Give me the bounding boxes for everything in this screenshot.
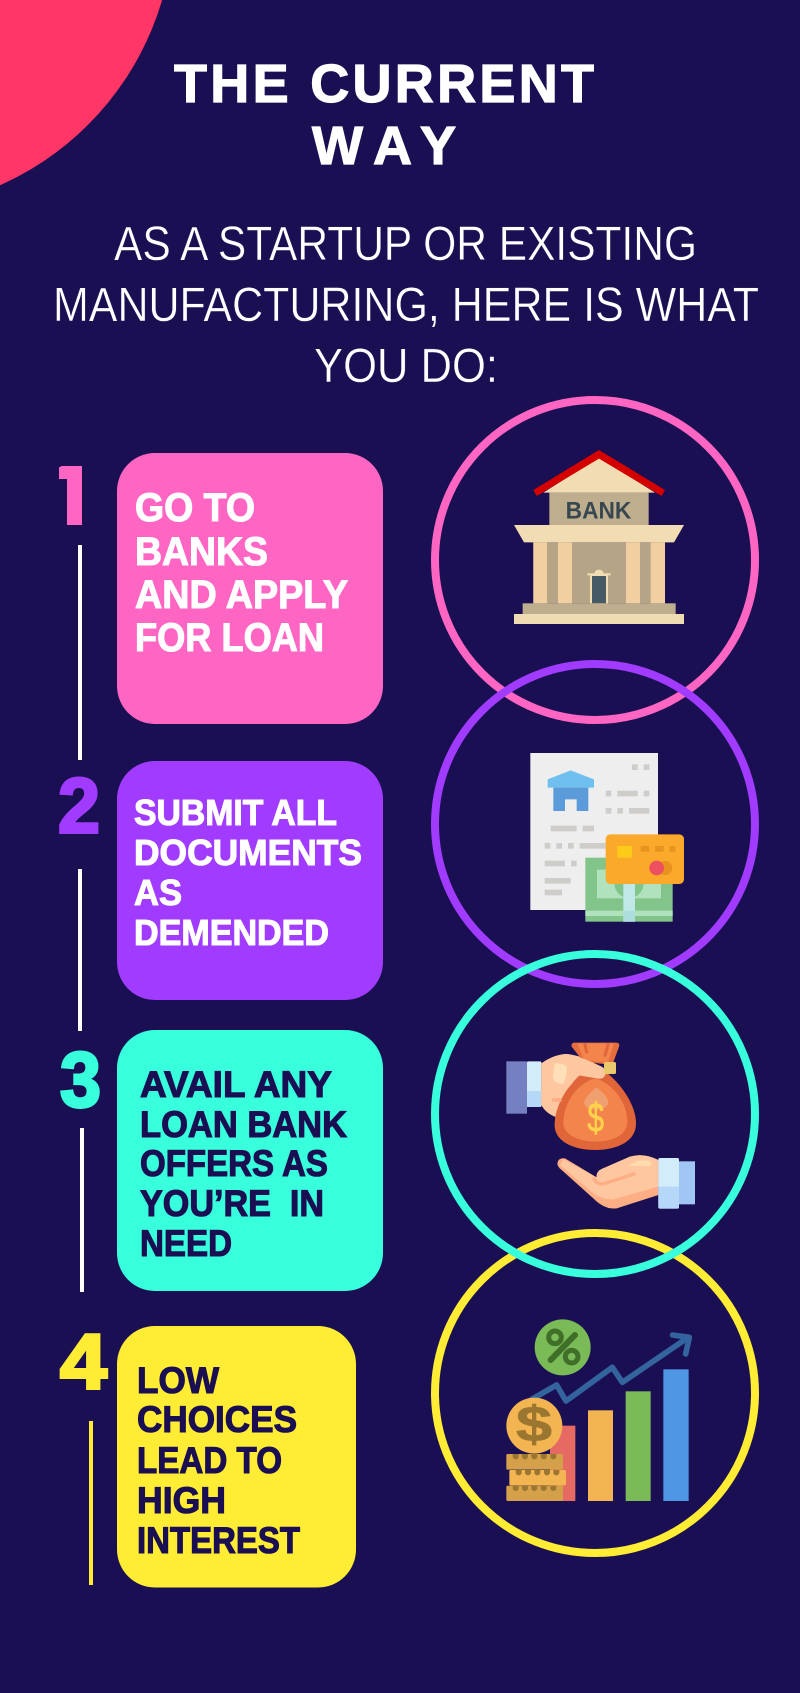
icon: hands exchanging money bag [506, 1043, 695, 1209]
step 3: card: AVAIL ANY [140, 1064, 332, 1105]
step 4: card [117, 1326, 356, 1588]
subtitle [53, 218, 759, 393]
icon: rising bar chart with coins: $ [516, 1397, 552, 1453]
step 2: card: AS [134, 872, 182, 913]
step 1: card [117, 453, 383, 724]
step 4: card: LEAD TO [137, 1440, 282, 1481]
icon: hands exchanging money bag: $ [587, 1094, 604, 1140]
step 2: card: DOCUMENTS [134, 832, 362, 873]
circle ring: step 3 [435, 954, 755, 1274]
corner decorative circle [0, 0, 174, 210]
step 3: number: 3 [60, 1036, 101, 1124]
icon: bank building: BANK [566, 498, 632, 525]
step 2: card [117, 761, 383, 1000]
subtitle: AS A STARTUP OR EXISTING [114, 218, 697, 271]
subtitle: YOU DO: [314, 340, 498, 393]
circle ring: step 1 [435, 400, 755, 720]
step 1: connector line [78, 545, 82, 760]
circle ring: step 2 [435, 664, 755, 984]
title: WAY [312, 116, 456, 176]
step 2: number: 2 [58, 762, 100, 850]
step 4: card: CHOICES [137, 1399, 297, 1440]
step 3: card: YOU’RE IN [140, 1183, 324, 1224]
step 4: number: 4 [60, 1318, 107, 1406]
step 3: connector line [80, 1128, 84, 1292]
title [174, 54, 594, 176]
title: THE CURRENT [174, 54, 594, 114]
circle ring: step 4 [435, 1233, 755, 1553]
step 4: connector line [89, 1421, 93, 1585]
step 3: card [117, 1030, 383, 1291]
step 3: card: OFFERS AS [140, 1143, 328, 1184]
step 1: number: 1 [42, 448, 102, 544]
step 4: card: LOW [137, 1360, 219, 1401]
icon: document with money and card [530, 753, 684, 922]
step 4: card: HIGH [137, 1480, 226, 1521]
icon: rising bar chart with coins [506, 1319, 689, 1501]
step 1: card: FOR LOAN [135, 616, 324, 660]
step 1: card: BANKS [135, 530, 268, 574]
step 2: card: SUBMIT ALL [134, 792, 337, 833]
step 1: card: GO TO [135, 486, 255, 530]
icon: bank building [514, 450, 684, 624]
step 2: connector line [78, 869, 82, 1031]
step 3: card: LOAN BANK [140, 1104, 347, 1145]
step 1: card: AND APPLY [135, 573, 348, 617]
step 4: card: INTEREST [137, 1520, 300, 1561]
step 2: card: DEMENDED [134, 912, 329, 953]
step 3: card: NEED [140, 1223, 232, 1264]
